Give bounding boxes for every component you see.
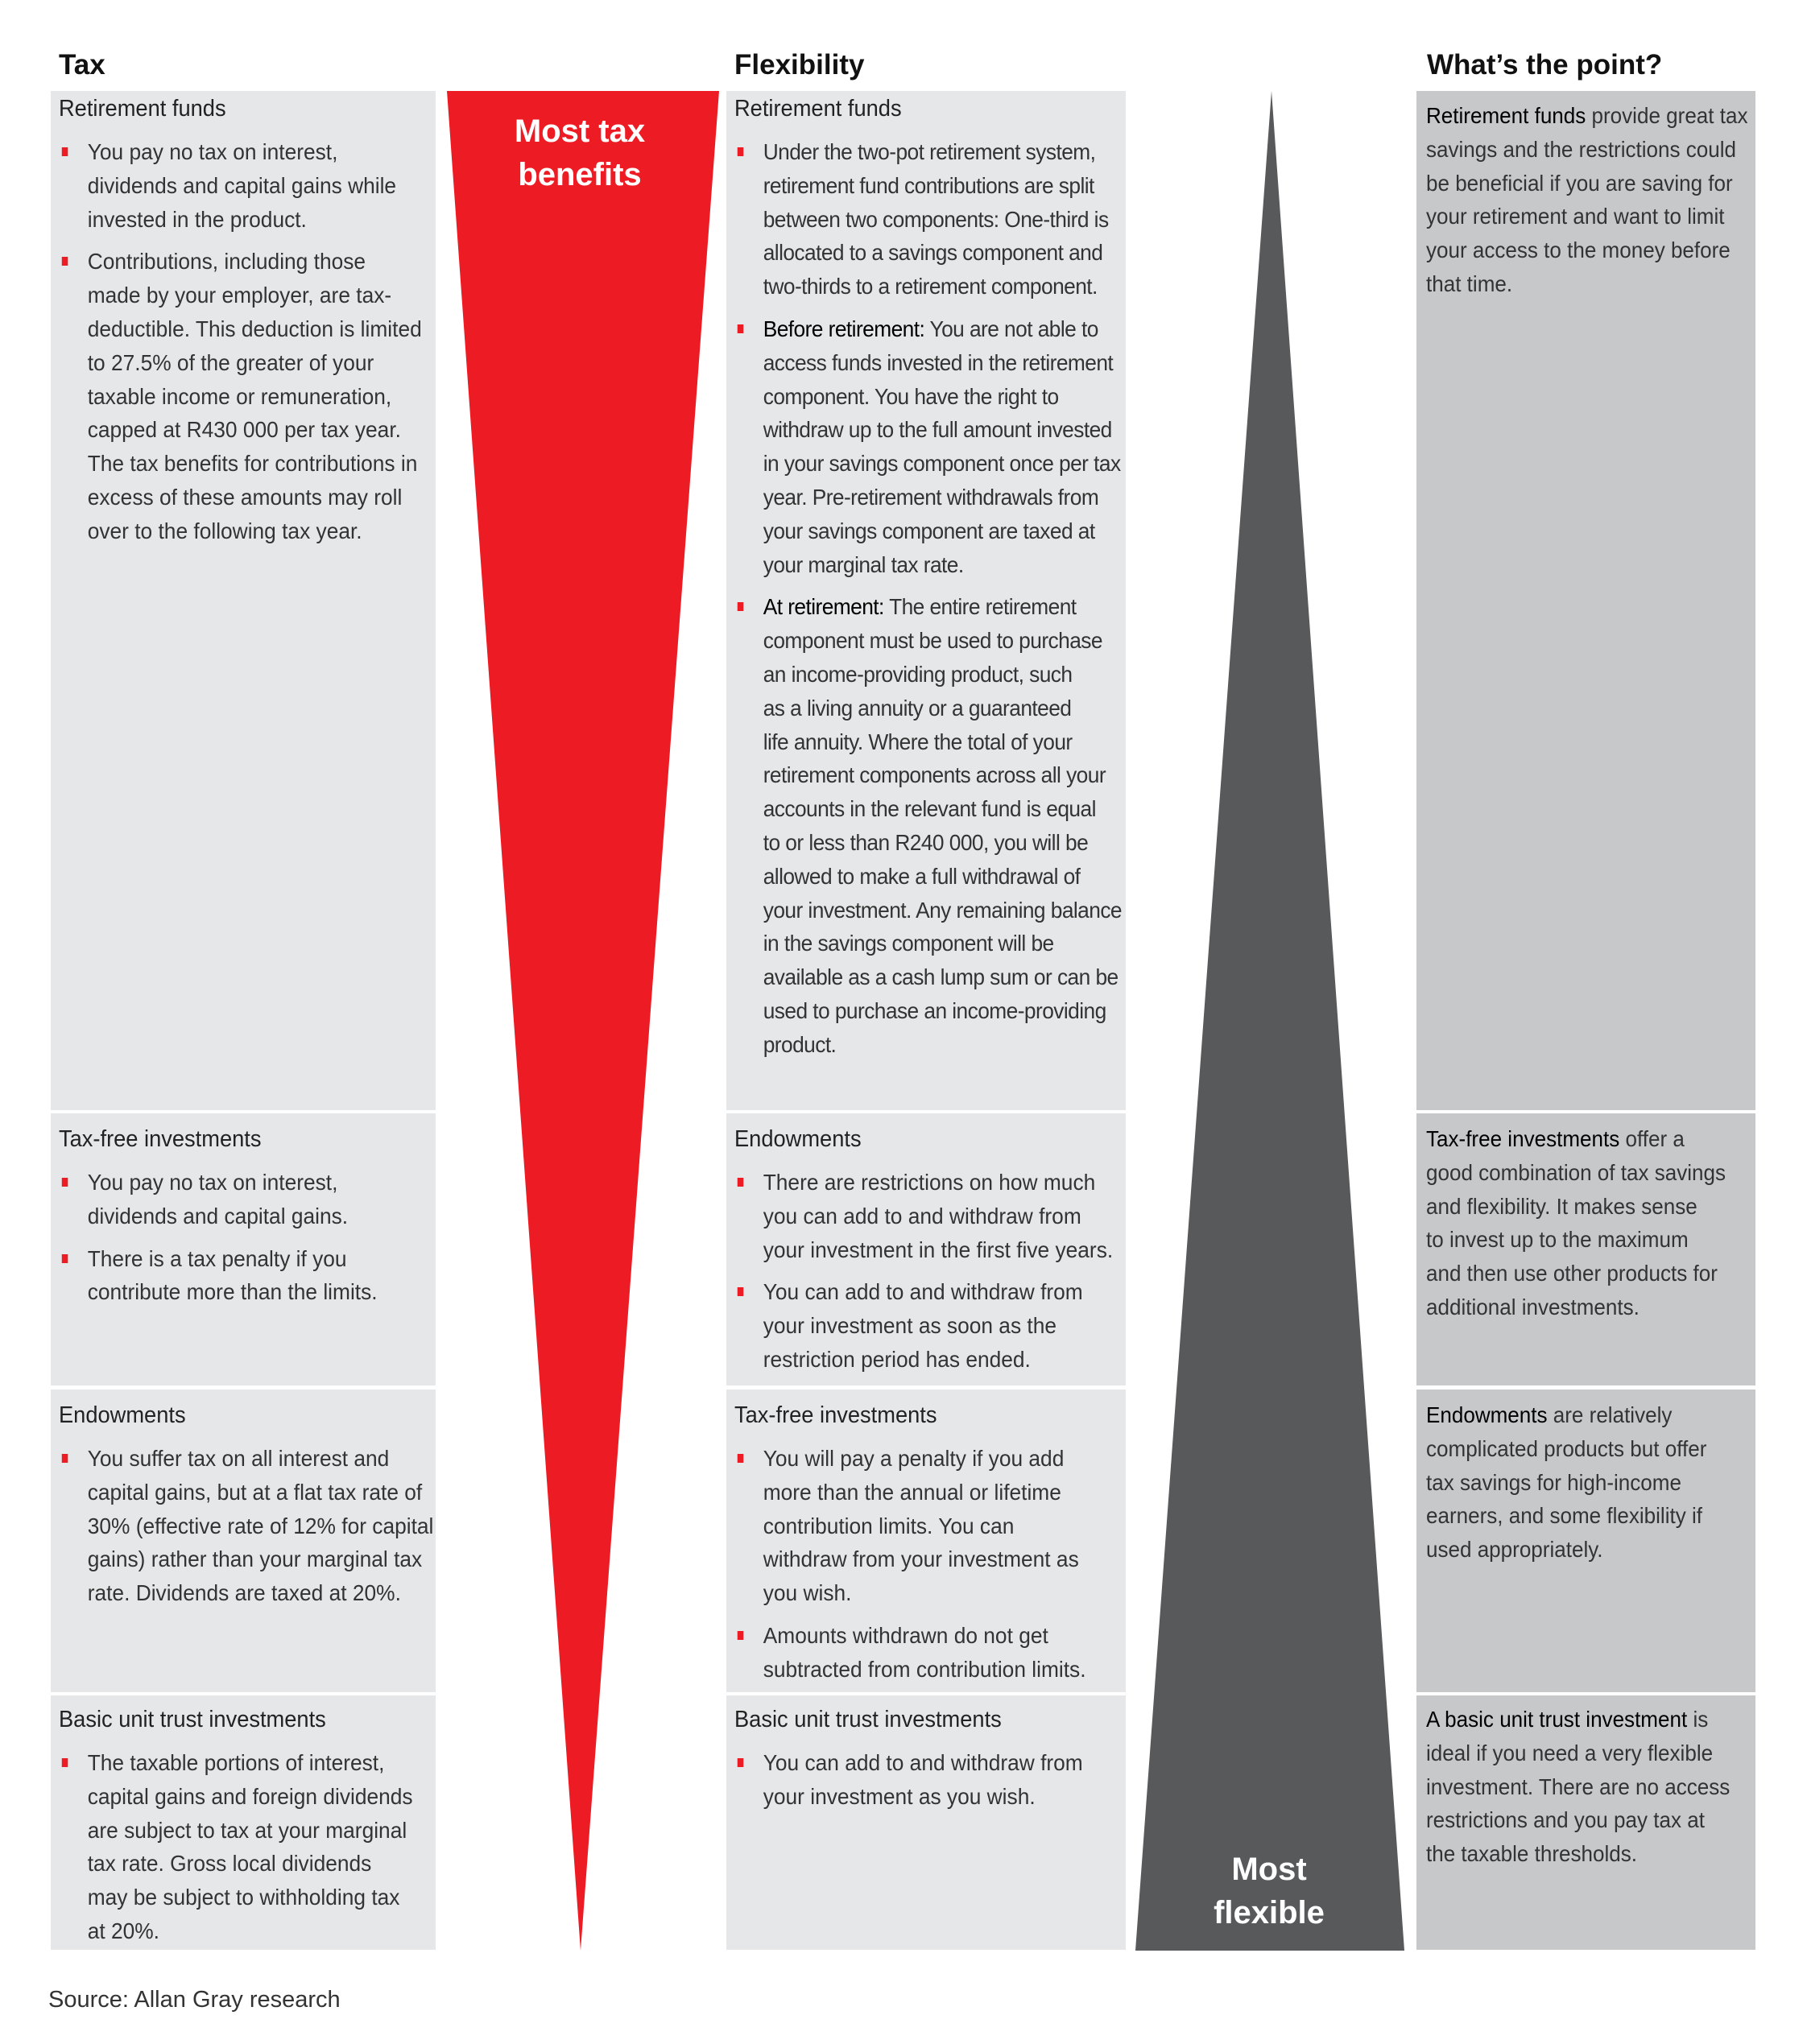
cell: flexibility retirement funds: life annuity. Where the total of your (763, 729, 1073, 754)
cell: flexibility tax-free: Amounts withdrawn do not get (763, 1623, 1048, 1648)
heading: Flexibility: Flexibility (734, 49, 864, 81)
label: Most tax benefits: benefits (518, 157, 642, 192)
cell: flexibility tax-free: withdraw from your investment as (763, 1546, 1079, 1571)
cell: tax retirement funds: invested in the product. (88, 207, 307, 232)
cell: tax tax-free (59, 1126, 378, 1304)
cell: flexibility retirement funds: Before retirement: You are not able to (763, 316, 1098, 341)
label: Most flexible: Most (1231, 1852, 1307, 1887)
cell: flexibility retirement funds: allowed to make a full withdrawal of (763, 864, 1080, 889)
cell: flexibility retirement funds: product. (763, 1032, 836, 1057)
cell: flexibility retirement funds: component. You have the right to (763, 384, 1059, 409)
cell: point endowments: used appropriately. (1426, 1537, 1603, 1562)
heading: What's the point?: What’s the point? (1427, 49, 1662, 81)
cell: tax retirement funds: to 27.5% of the greater of your (88, 350, 374, 375)
cell: flexibility unit trusts (734, 1707, 1083, 1809)
cell: tax endowments: gains) rather than your marginal tax (88, 1546, 422, 1571)
cell: tax tax-free: Tax-free investments (59, 1126, 261, 1152)
cell: tax endowments (59, 1402, 433, 1605)
cell: flexibility endowments: Endowments (734, 1126, 862, 1152)
cell: tax endowments: You suffer tax on all interest and (88, 1446, 389, 1471)
cell: tax retirement funds: over to the following tax year. (88, 518, 362, 543)
cell: point unit trusts: investment. There are no access (1426, 1774, 1730, 1799)
cell: flexibility retirement funds: available as a cash lump sum or can be (763, 964, 1119, 989)
label: Most tax benefits (515, 114, 645, 192)
cell: flexibility retirement funds: withdraw up to the full amount invested (763, 417, 1112, 442)
cell: flexibility tax-free: You will pay a penalty if you add (763, 1446, 1064, 1471)
cell: flexibility retirement funds: accounts in the relevant fund is equal (763, 796, 1096, 821)
cell: point tax-free (1426, 1126, 1726, 1319)
cell: tax endowments: capital gains, but at a flat tax rate of (88, 1480, 422, 1505)
cell: flexibility retirement funds: Retirement funds (734, 96, 902, 122)
cell: tax retirement funds: excess of these amounts may roll (88, 485, 402, 510)
cell: flexibility endowments: you can add to and withdraw from (763, 1204, 1081, 1228)
cell: flexibility tax-free: contribution limits. You can (763, 1513, 1014, 1538)
label: Most flexible (1214, 1852, 1325, 1930)
cell: flexibility retirement funds: used to purchase an income-providing (763, 998, 1106, 1023)
cell: tax retirement funds: capped at R430 000 per tax year. (88, 417, 401, 442)
cell: tax unit trusts: tax rate. Gross local dividends (88, 1851, 371, 1876)
cell: point retirement: be beneficial if you are saving for (1426, 171, 1733, 196)
cell: flexibility tax-free: you wish. (763, 1580, 851, 1605)
cell: flexibility retirement funds: your savings component are taxed at (763, 518, 1095, 543)
cell: flexibility retirement funds: allocated to a savings component and (763, 240, 1102, 265)
cell: point unit trusts: A basic unit trust investment is (1426, 1707, 1708, 1732)
cell: flexibility unit trusts: You can add to and withdraw from (763, 1750, 1083, 1775)
cell: tax unit trusts: may be subject to withholding tax (88, 1885, 399, 1910)
cell: point tax-free: and then use other products for (1426, 1261, 1718, 1286)
cell: point unit trusts: the taxable thresholds. (1426, 1841, 1637, 1866)
cell: flexibility retirement funds: your marginal tax rate. (763, 552, 964, 577)
cell: flexibility endowments: your investment as soon as the (763, 1313, 1056, 1338)
cell: point tax-free: good combination of tax savings (1426, 1160, 1726, 1185)
cell: flexibility tax-free (734, 1402, 1086, 1682)
cell: tax retirement funds: Retirement funds (59, 96, 226, 122)
cell: point tax-free: Tax-free investments offer a (1426, 1126, 1685, 1151)
cell: tax retirement funds: taxable income or remuneration, (88, 384, 391, 409)
cell: flexibility unit trusts: Basic unit trust investments (734, 1707, 1002, 1732)
cell: flexibility retirement funds: Under the two-pot retirement system, (763, 139, 1095, 164)
cell: flexibility tax-free: more than the annual or lifetime (763, 1480, 1061, 1505)
cell: tax endowments: Endowments (59, 1402, 186, 1428)
cell: flexibility retirement funds: as a living annuity or a guaranteed (763, 696, 1071, 721)
cell: flexibility endowments (734, 1126, 1113, 1372)
cell: tax retirement funds: You pay no tax on interest, (88, 139, 337, 164)
cell: tax unit trusts: are subject to tax at your marginal (88, 1818, 407, 1843)
cell: flexibility tax-free: subtracted from contribution limits. (763, 1657, 1086, 1682)
cell: tax retirement funds: The tax benefits for contributions in (88, 451, 417, 476)
cell: flexibility retirement funds: to or less than R240 000, you will be (763, 830, 1088, 855)
cell: tax retirement funds: dividends and capital gains while (88, 173, 396, 198)
cell: point unit trusts: ideal if you need a very flexible (1426, 1740, 1713, 1765)
cell: flexibility retirement funds: retirement fund contributions are split (763, 173, 1094, 198)
source note: Source: Allan Gray research (48, 1987, 341, 2013)
cell: point tax-free: to invest up to the maximum (1426, 1227, 1689, 1252)
cell: flexibility endowments: There are restrictions on how much (763, 1170, 1095, 1195)
cell: flexibility retirement funds: in your savings component once per tax (763, 451, 1121, 476)
cell: point endowments (1426, 1402, 1706, 1562)
cell: tax endowments: rate. Dividends are taxed at 20%. (88, 1580, 401, 1605)
cell: point tax-free: additional investments. (1426, 1295, 1640, 1319)
cell: tax unit trusts: The taxable portions of interest, (88, 1750, 384, 1775)
cell: point retirement: Retirement funds provide great tax (1426, 103, 1747, 128)
label: Most flexible: flexible (1214, 1895, 1325, 1930)
cell: tax tax-free: contribute more than the limits. (88, 1279, 378, 1304)
cell: point retirement: your retirement and want to limit (1426, 204, 1725, 229)
cell: tax retirement funds: deductible. This deduction is limited (88, 316, 422, 341)
cell: point retirement: savings and the restrictions could (1426, 137, 1736, 162)
cell: tax tax-free: dividends and capital gains. (88, 1204, 348, 1228)
cell: point endowments: tax savings for high-income (1426, 1470, 1681, 1495)
cell: flexibility retirement funds: an income-providing product, such (763, 662, 1072, 687)
cell: point retirement: your access to the money before (1426, 237, 1731, 262)
cell: point retirement (1426, 103, 1747, 296)
cell: flexibility retirement funds: access funds invested in the retirement (763, 350, 1113, 375)
cell: tax tax-free: You pay no tax on interest, (88, 1170, 337, 1195)
cell: flexibility retirement funds: At retirement: The entire retirement (763, 594, 1077, 619)
cell: flexibility retirement funds: your investment. Any remaining balance (763, 898, 1122, 923)
cell: flexibility endowments: You can add to and withdraw from (763, 1279, 1083, 1304)
cell: point unit trusts: restrictions and you pay tax at (1426, 1807, 1705, 1832)
cell: flexibility endowments: your investment in the first five years. (763, 1237, 1113, 1262)
cell: tax unit trusts: at 20%. (88, 1918, 159, 1943)
cell: tax retirement funds: made by your employer, are tax- (88, 283, 391, 308)
cell: point endowments: complicated products but offer (1426, 1436, 1706, 1461)
cell: point endowments: Endowments are relatively (1426, 1402, 1672, 1427)
cell: point endowments: earners, and some flexibility if (1426, 1503, 1702, 1528)
cell: flexibility tax-free: Tax-free investments (734, 1402, 937, 1428)
cell: tax unit trusts: Basic unit trust investments (59, 1707, 326, 1732)
label: Most tax benefits: Most tax (515, 114, 645, 149)
cell: tax retirement funds: Contributions, including those (88, 249, 366, 274)
cell: flexibility retirement funds: retirement components across all your (763, 762, 1106, 787)
cell: tax unit trusts: capital gains and foreign dividends (88, 1784, 413, 1809)
cell: flexibility retirement funds: in the savings component will be (763, 931, 1054, 956)
cell: flexibility endowments: restriction period has ended. (763, 1347, 1031, 1372)
cell: flexibility retirement funds: year. Pre-retirement withdrawals from (763, 485, 1098, 510)
cell: tax endowments: 30% (effective rate of 12% for capital (88, 1513, 433, 1538)
cell: flexibility retirement funds (734, 96, 1122, 1057)
cell: tax tax-free: There is a tax penalty if you (88, 1246, 347, 1271)
cell: flexibility unit trusts: your investment as you wish. (763, 1784, 1036, 1809)
cell: flexibility retirement funds: two-thirds to a retirement component. (763, 274, 1098, 299)
cell: flexibility retirement funds: between two components: One-third is (763, 207, 1109, 232)
cell: tax retirement funds (59, 96, 422, 543)
cell: point tax-free: and flexibility. It makes sense (1426, 1194, 1697, 1219)
cell: tax unit trusts (59, 1707, 413, 1943)
cell: point retirement: that time. (1426, 271, 1512, 296)
cell: flexibility retirement funds: component must be used to purchase (763, 628, 1102, 653)
cell: point unit trusts (1426, 1707, 1730, 1866)
heading: Tax: Tax (59, 49, 105, 81)
